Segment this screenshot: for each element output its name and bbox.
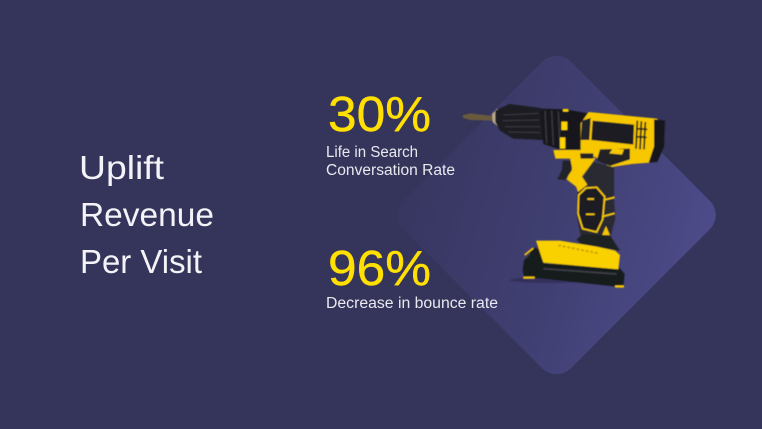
housing window: [591, 121, 634, 145]
heading: Uplift Revenue Per Visit: Per Visit: [80, 244, 203, 281]
heading: Uplift Revenue Per Visit: [79, 150, 214, 281]
stat label: Conversation Rate: [326, 162, 455, 179]
heading: Uplift Revenue Per Visit: Revenue: [80, 197, 214, 234]
trigger: [557, 161, 572, 180]
icon: yellow cordless drill: [462, 104, 665, 288]
stat label: Decrease in bounce rate: [326, 295, 498, 312]
handle grip: [578, 187, 605, 232]
battery top: [536, 241, 620, 269]
chuck: [495, 104, 543, 140]
stat label: [326, 144, 455, 179]
handle: [577, 161, 615, 238]
battery shadow: [510, 277, 590, 283]
motor housing: [581, 112, 659, 167]
background diamond: [389, 47, 724, 383]
trigger guard and neck: [553, 150, 595, 192]
stat number 96%: 96%: [328, 242, 431, 296]
collar yellow tags: [560, 109, 568, 149]
battery base: [523, 247, 625, 287]
chuck tip: [492, 108, 497, 126]
stat: 30% life in search conversation rate: [326, 88, 455, 179]
clutch collar: [540, 109, 588, 150]
handle base: [577, 234, 620, 251]
lower black panel: [597, 149, 630, 166]
stat: 96% decrease in bounce rate: [326, 242, 498, 312]
stat number 30%: 30%: [328, 88, 431, 142]
heading: Uplift Revenue Per Visit: Uplift: [79, 150, 165, 187]
vents: [636, 121, 647, 149]
drill bit: [462, 113, 493, 121]
stat label: Life in Search: [326, 144, 418, 161]
rear cap: [649, 119, 665, 163]
